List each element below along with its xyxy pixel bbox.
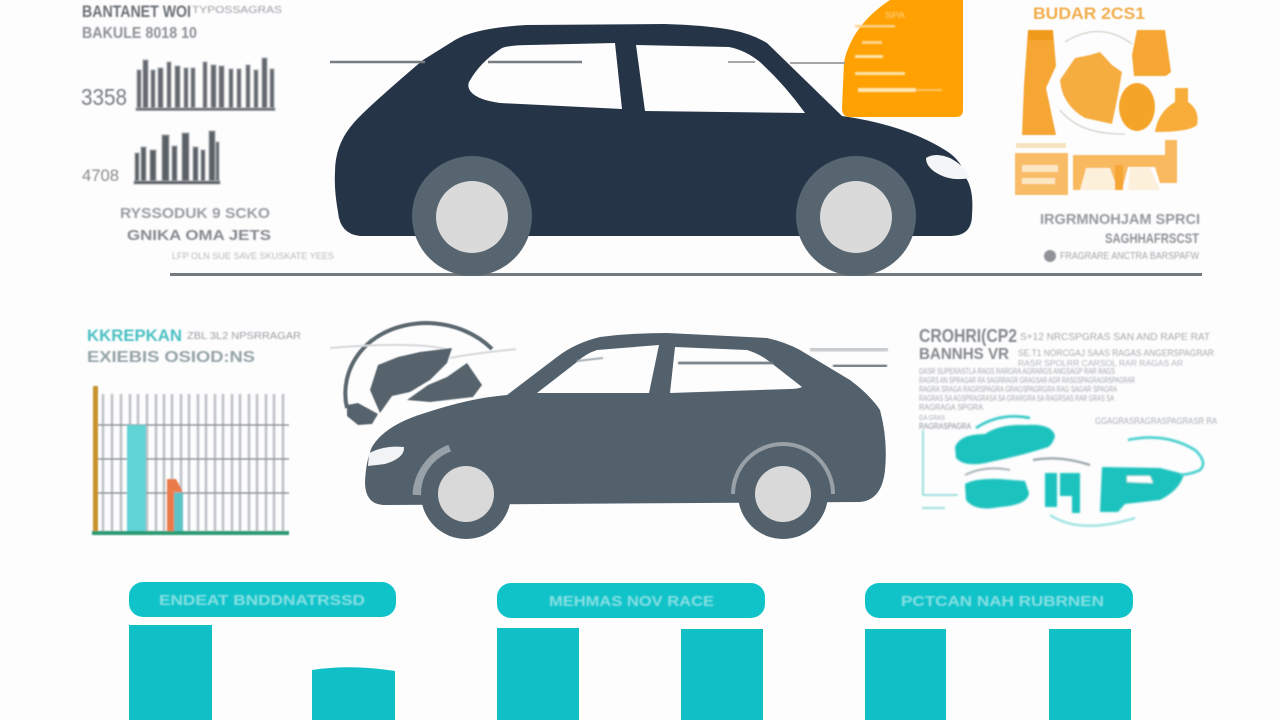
bar left	[497, 628, 579, 720]
wheel: front	[796, 156, 916, 276]
pill heading: PCTCAN NAH RUBRNEN	[901, 593, 1104, 610]
text block: left caption: GNIKA OMA JETS	[127, 227, 271, 244]
window: rear	[468, 43, 622, 109]
car body	[335, 24, 972, 236]
pill heading: ENDEAT BNDDNATRSSD	[159, 592, 365, 609]
heading and body text: RAGRAGA SPGRA	[919, 403, 984, 412]
orange panel	[842, 0, 963, 117]
text block: right caption	[1040, 211, 1200, 262]
heading and body text: RAGRASPAGRA	[919, 422, 972, 431]
text block: left caption	[120, 205, 334, 261]
speed lines: lower car	[577, 349, 888, 366]
window: front	[636, 45, 805, 113]
panel: top left stats	[81, 2, 334, 261]
orange parts	[1015, 30, 1198, 195]
orange bar	[167, 479, 182, 531]
heading and body text: RASR SPOLRR CARSOL RAR RAGAS AR	[1018, 359, 1183, 368]
pill heading	[129, 582, 396, 617]
heading: teal: KKREPKAN	[87, 326, 182, 345]
panel: bottom column 2	[497, 583, 765, 720]
bar tall	[129, 625, 212, 720]
lower car	[365, 333, 886, 539]
headlight	[926, 155, 970, 179]
heading: top left: TYPOSSAGRAS	[192, 5, 282, 16]
heading and body text: GGAGRASRAGRASPAGRASR RA	[1095, 416, 1217, 426]
teal diagram	[922, 416, 1203, 526]
pill heading	[497, 583, 765, 618]
panel: bottom column 1	[129, 582, 396, 720]
heading: top left	[82, 2, 282, 42]
top car	[335, 24, 972, 276]
text block: right caption: IRGRMNOHJAM SPRCI	[1040, 211, 1200, 228]
heading and body text: RAGRS AN SPRAGAR RA SAGRRAGR GRAGSAR AGR RASGSPAGRAGRSPAGRAR	[919, 376, 1135, 385]
speed line: left of top car	[330, 61, 582, 63]
heading and body text: S+12 NRCSPGRAS SAN AND RAPE RAT	[1020, 332, 1210, 343]
heading: top left: BANTANET WOI	[82, 2, 191, 21]
pill heading: MEHMAS NOV RACE	[549, 593, 714, 610]
window: rear	[670, 347, 802, 393]
bar right	[1049, 629, 1131, 720]
ground line	[170, 273, 1202, 276]
text block: right caption: SAGHHAFRSCST	[1105, 230, 1199, 246]
heading and body text: BANNHS VR	[919, 346, 1009, 363]
heading and body text: RAGRA SRAGA RAGRSPAGRA GRAGSPAGRGRA RAG SAGAR SPAGRA	[919, 385, 1117, 394]
heading: orange: BUDAR 2CS1	[1033, 4, 1145, 23]
heading and body text: RAGRAS SA AGSPRAGRASA SA GRARGRA SA RAGRSAS RAR GRAS SA	[919, 394, 1114, 403]
pill heading	[865, 583, 1133, 618]
bar left	[865, 629, 946, 720]
heading: teal: ZBL 3L2 NPSRRAGAR	[187, 331, 301, 342]
wheel: rear	[733, 444, 833, 539]
wheel: rear	[412, 156, 532, 276]
small teal bar	[174, 493, 183, 531]
text: orange panel lines: SPA	[885, 11, 906, 20]
bar chart: lower grey bars	[134, 131, 220, 184]
panel: orange parts illustration	[1015, 4, 1198, 195]
heading and body text: SE.T1 NORCGAJ SAAS RAGAS ANGERSPAGRAR	[1018, 348, 1214, 358]
heading: top left: BAKULE 8018 10	[82, 25, 197, 42]
text block: left caption: LFP OLN SUE SAVE SKUSKATE YEES	[172, 251, 334, 261]
panel: middle right text and teal diagram	[919, 326, 1217, 526]
heading and body text: GA GRAS	[919, 415, 945, 422]
text block: right caption: FRAGRARE ANCTRA BARSPAFW	[1060, 251, 1199, 262]
wheel: front	[417, 449, 511, 539]
heading: teal: EXIEBIS OSIOD:NS	[87, 349, 255, 366]
bar right	[681, 629, 763, 720]
panel: middle left chart	[87, 326, 301, 535]
heading and body text: CROHRI(CP2	[919, 326, 1017, 346]
heading and body text	[919, 326, 1217, 431]
window: front	[537, 345, 659, 393]
label: second bar chart: 4708	[82, 166, 119, 185]
bar chart: upper grey bars	[136, 58, 275, 110]
grid lines chart	[92, 386, 289, 535]
car body	[365, 333, 886, 505]
teal bar	[127, 425, 146, 532]
headlight	[368, 447, 404, 466]
label: first bar chart: 3358	[81, 84, 127, 110]
icon: globe with arc	[330, 323, 516, 425]
heading: teal	[87, 326, 301, 366]
speed line: right of top car	[728, 62, 845, 63]
text block: left caption: RYSSODUK 9 SCKO	[120, 205, 270, 222]
heading and body text: DASR SUPERASTLA RAGS RARGRA AGRARGS ANGSAGP RAR RAGS	[919, 367, 1115, 376]
bar short	[312, 667, 395, 720]
panel: bottom column 3	[865, 583, 1133, 720]
axis	[93, 386, 98, 534]
